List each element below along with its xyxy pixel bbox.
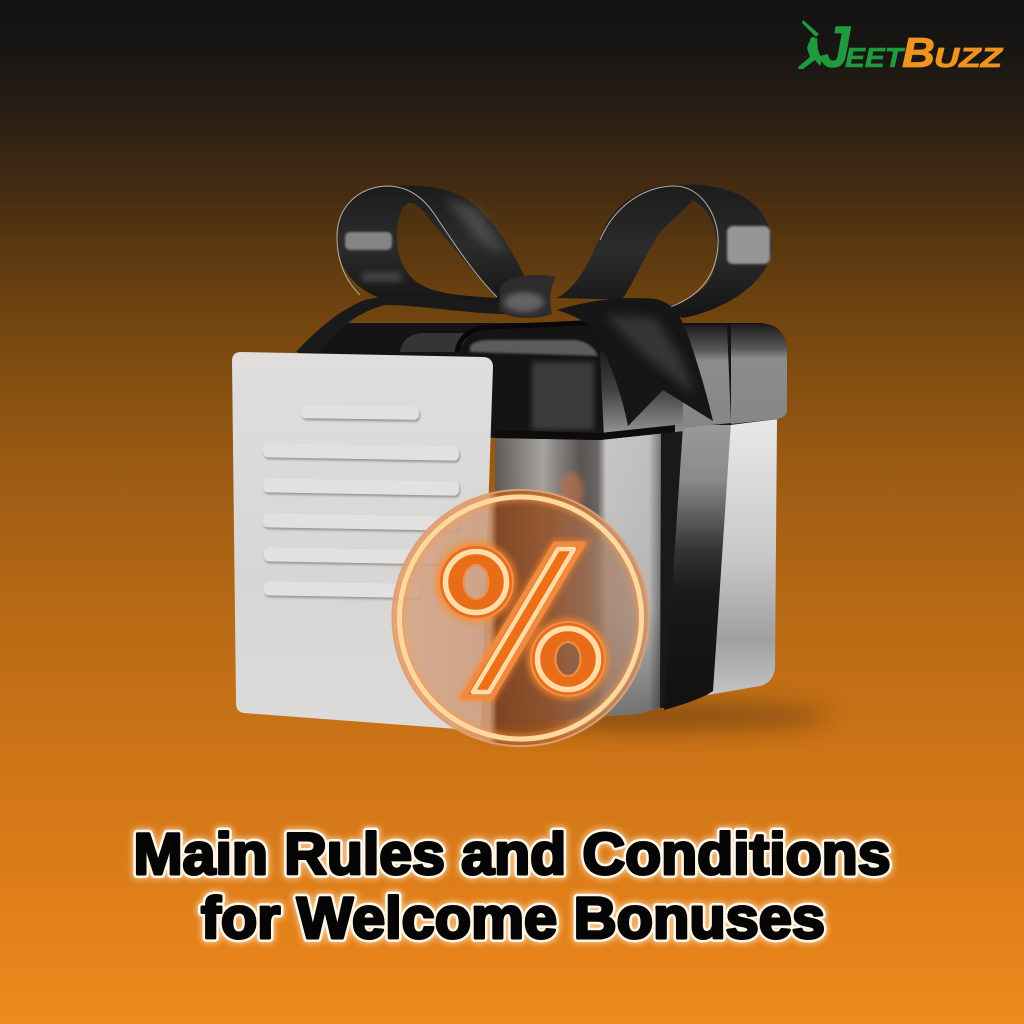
flame reflection: [560, 472, 584, 512]
left loop edge line: [337, 186, 497, 297]
coin body: [392, 490, 648, 746]
box front face: [495, 428, 666, 725]
box lid: [298, 323, 787, 440]
logo wordmark: EET: [845, 42, 906, 73]
title: [134, 822, 890, 951]
knot highlight: [504, 292, 544, 312]
right loop edge line: [600, 186, 718, 307]
slash: [463, 544, 583, 697]
ground shadow: [470, 702, 830, 730]
ribbon left tail: [296, 296, 505, 352]
title text: for Welcome Bonuses: [201, 886, 825, 951]
vertical ribbon on box: [664, 422, 731, 710]
lid right face: [731, 324, 787, 424]
ribbon over lid: [457, 322, 600, 352]
lid bottom dark rim: [495, 425, 675, 440]
logo wordmark: UZZ: [934, 42, 1003, 73]
box right face: [708, 419, 777, 695]
logo icon: cricket player: [798, 20, 822, 69]
lid top highlight band: [470, 340, 598, 356]
vertical ribbon shadow strip: [660, 428, 686, 708]
paper sheet: [232, 352, 493, 730]
ribbon drape: [557, 298, 713, 426]
front face shading: [495, 428, 666, 725]
neon ring: [400, 497, 642, 739]
logo wordmark: B: [902, 29, 935, 76]
title outline: for Welcome Bonuses: [201, 886, 825, 951]
logo wordmark: J: [820, 15, 852, 80]
line faces: [263, 405, 459, 598]
percent glow: [439, 544, 605, 697]
line shadows: [264, 407, 460, 600]
title outline: [134, 822, 890, 951]
lid front vertical reflection: [532, 362, 594, 430]
ribbon right loop: [557, 185, 772, 318]
logo wordmark: [820, 15, 1003, 80]
drape highlight: [605, 315, 695, 395]
title text: Main Rules and Conditions: [134, 822, 890, 887]
title outline: Main Rules and Conditions: [134, 822, 890, 887]
title glow: for Welcome Bonuses: [201, 886, 825, 951]
neon ring glow: [400, 497, 642, 739]
percent coin: [392, 490, 648, 746]
lid ribbon band: [683, 325, 731, 428]
title glow: Main Rules and Conditions: [134, 822, 890, 887]
ribbon knot: [499, 275, 556, 318]
percent sign: [439, 544, 605, 697]
text lines embossed: [263, 405, 460, 600]
lid front grey section: [600, 345, 684, 438]
bottom ring: [531, 622, 605, 696]
title glow: [134, 822, 890, 951]
left loop diagonal sheen: [445, 197, 505, 255]
right loop highlight: [727, 226, 770, 264]
lid left highlight: [400, 333, 470, 352]
top ring: [439, 545, 513, 619]
logo: JeetBuzz: [798, 15, 1003, 80]
left loop highlight: [345, 232, 392, 250]
illustration: gift box: [296, 185, 830, 730]
left loop lower sheen: [362, 272, 402, 282]
document page: [232, 352, 493, 730]
ribbon left loop: [337, 185, 524, 306]
title text: [134, 822, 890, 951]
